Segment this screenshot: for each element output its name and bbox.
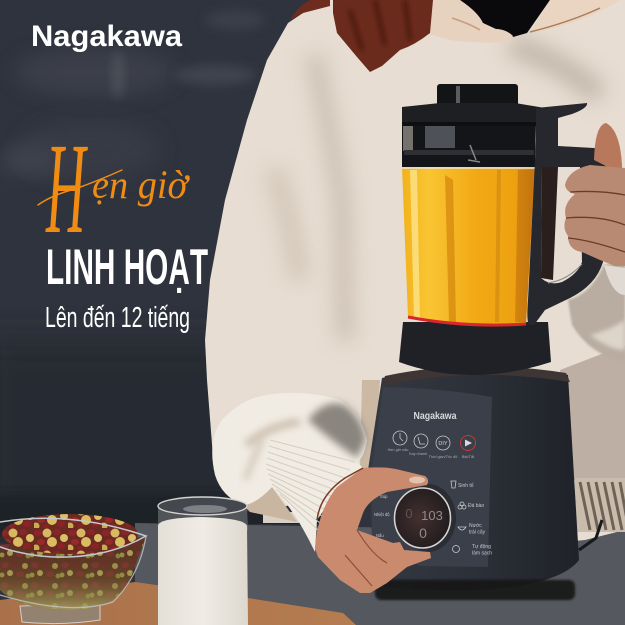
- product: blender: [368, 84, 612, 600]
- woman's red-brown hair: [290, 0, 433, 72]
- function labels: Nước: [469, 523, 482, 529]
- dial display digits: [405, 506, 443, 541]
- function labels: Nhiệt độ: [374, 512, 390, 517]
- heading script: Hẹn giờ: H: [45, 116, 88, 261]
- icon: timer: [393, 431, 407, 445]
- panel button labels: [388, 448, 475, 459]
- panel button labels: Thời gian/Tốc độ: [429, 455, 457, 459]
- blender base body: [368, 366, 579, 600]
- cuff ribs: [266, 440, 355, 530]
- dial display digits: 0: [405, 506, 413, 521]
- jar: upper section: [402, 120, 536, 167]
- panel brand name: Nagakawa: [414, 411, 457, 422]
- hand on dial: [315, 467, 431, 593]
- glass of milk: [158, 497, 248, 625]
- tan background behind sleeve: [360, 380, 380, 480]
- control dial: [394, 484, 456, 552]
- icon: DIY: DIY: [438, 441, 448, 447]
- icon: power play button: [460, 436, 476, 450]
- hand on handle: [564, 123, 625, 266]
- icon: DIY: [436, 436, 450, 450]
- panel button labels: Xay nhanh: [409, 452, 427, 456]
- panel button labels: Hẹn giờ nấu: [388, 448, 408, 452]
- panel: woman's sweater: [205, 0, 625, 560]
- function labels: Nấu: [376, 533, 384, 538]
- checkered cloth strip: [230, 512, 325, 524]
- wooden board: [0, 582, 356, 625]
- dial display digits: 0: [419, 525, 427, 541]
- thumb nail: [409, 476, 425, 484]
- bowl of beans: [0, 514, 146, 624]
- jar: juice: [402, 167, 535, 326]
- logo: Nagakawa: Nagakawa: [31, 20, 182, 53]
- right sleeve shading: [568, 262, 625, 362]
- jar handle: [527, 103, 612, 325]
- dark neckline: [460, 0, 550, 37]
- function labels: làm sạch: [472, 550, 492, 556]
- sweater lower right: [560, 345, 625, 480]
- jar lid and knob: [402, 84, 545, 126]
- power cord: [579, 520, 602, 550]
- table surface: [135, 523, 625, 625]
- dial display digits: 103: [421, 508, 443, 523]
- blender collar: [399, 322, 551, 375]
- function labels: Sinh tố: [458, 483, 474, 489]
- ribbed hem right: [575, 478, 625, 532]
- subheading: Lên đến 12 tiếng: Lên đến 12 tiếng: [45, 302, 190, 334]
- heading: LINH HOẠT: LINH HOẠT: [46, 239, 208, 295]
- panel button labels: Bật/Tắt: [462, 454, 475, 459]
- sweater collar: [425, 0, 620, 43]
- function labels: Súp: [380, 494, 388, 499]
- sweater cuff, left sleeve: [212, 393, 367, 552]
- function icons: [451, 481, 466, 552]
- sweater fold shadows: [272, 45, 600, 340]
- heading script: Hẹn giờ: [38, 116, 191, 261]
- cuff grey shadow: [308, 403, 366, 458]
- heading script: Hẹn giờ: ẹn giờ: [92, 163, 191, 207]
- tan gap under cuff: [243, 487, 297, 522]
- bowl foot: [20, 604, 100, 624]
- handle highlight: [548, 264, 582, 283]
- function labels: Đá bào: [468, 503, 484, 509]
- function labels: Tự động: [472, 544, 491, 550]
- handle hole shadow: [541, 167, 558, 280]
- control panel: [372, 387, 492, 567]
- function labels: trái cây: [469, 530, 486, 536]
- function labels: [374, 483, 492, 556]
- icon: quick blend: [414, 434, 428, 448]
